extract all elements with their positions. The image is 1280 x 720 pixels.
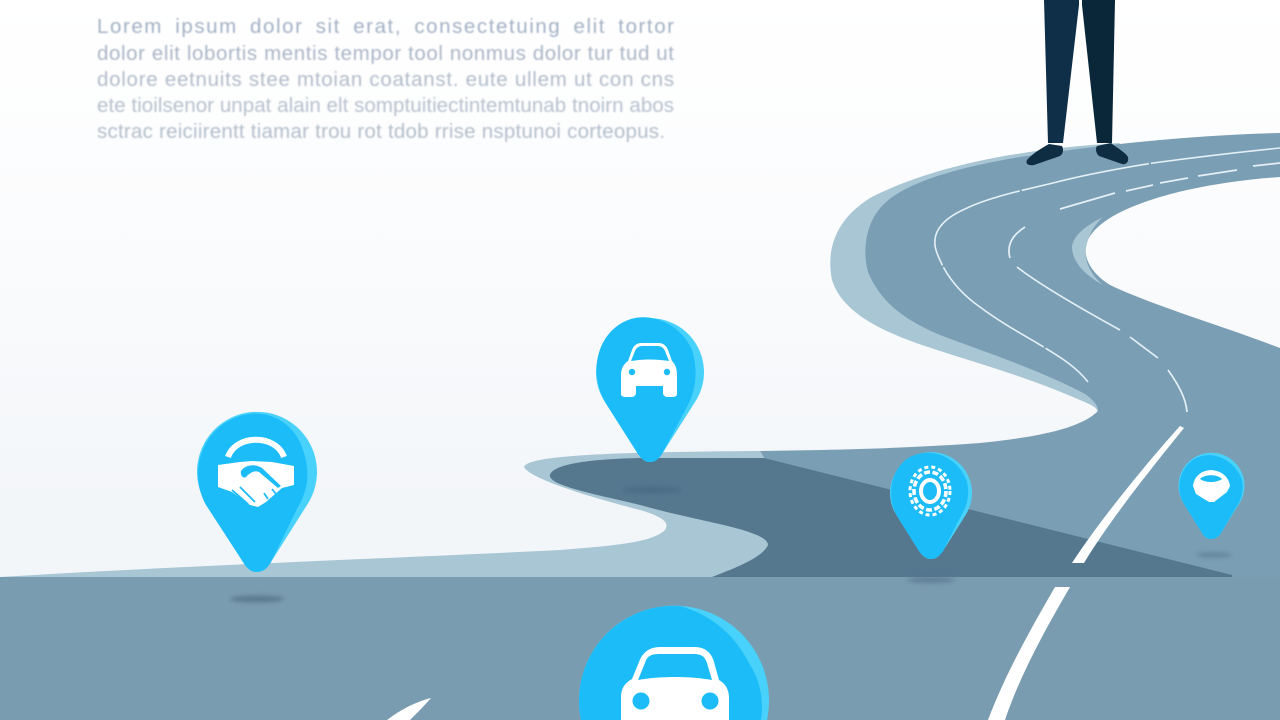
road marking: inner dashed lane line [1009, 163, 1280, 412]
road: pale lower bend [0, 451, 780, 577]
icon: top-view car [1193, 470, 1230, 502]
icon: large car [621, 647, 729, 720]
right trouser leg [1082, 0, 1115, 143]
text block: intro paragraph: Lorem ipsum dolor sit erat, consectetuing elit tortor [97, 15, 674, 38]
pin: top-view car [1178, 453, 1244, 539]
pin: network [890, 452, 972, 559]
road: foreground stretch [0, 577, 1280, 720]
road marking: bottom-left dash [387, 698, 431, 720]
text block: intro paragraph: dolor elit lobortis mentis tempor tool nonmus dolor tur tud ut [97, 42, 674, 65]
text block: intro paragraph: sctrac reiciirentt tiamar trou rot tdob rrise nsptunoi corteopus. [97, 120, 665, 143]
road: pale outer edge band [830, 143, 1120, 412]
icon: handshake [218, 440, 294, 507]
shadow: small car pin [1196, 552, 1232, 558]
left shoe [1026, 144, 1063, 165]
shadow: handshake pin [230, 596, 284, 602]
right shoe [1096, 143, 1128, 164]
pin: large car [579, 606, 769, 720]
text block: intro paragraph: ete tioilsenor unpat alain elt somptuitiectintemtunab tnoirn abos [97, 94, 674, 117]
road marking: centre line lower [988, 587, 1070, 720]
shadow: network pin [907, 577, 955, 583]
text block: intro paragraph [97, 15, 674, 143]
pin: car [596, 317, 704, 462]
road: pale inner crescent [1072, 217, 1103, 285]
road marking: centre line upper [1072, 426, 1184, 563]
road: main winding surface [760, 133, 1280, 577]
text block: intro paragraph: dolore eetnuits stee mtoian coatanst. eute ullem ut con cns [97, 68, 674, 91]
person legs and shoes [1026, 0, 1128, 165]
pin: handshake [197, 412, 317, 572]
icon: dotted ring [910, 467, 950, 515]
road marking: outer dashed lane line [935, 148, 1280, 382]
left trouser leg [1044, 0, 1079, 143]
shadow: car pin [622, 487, 682, 493]
icon: car [621, 343, 677, 397]
road: dark shaded section [550, 458, 1232, 577]
